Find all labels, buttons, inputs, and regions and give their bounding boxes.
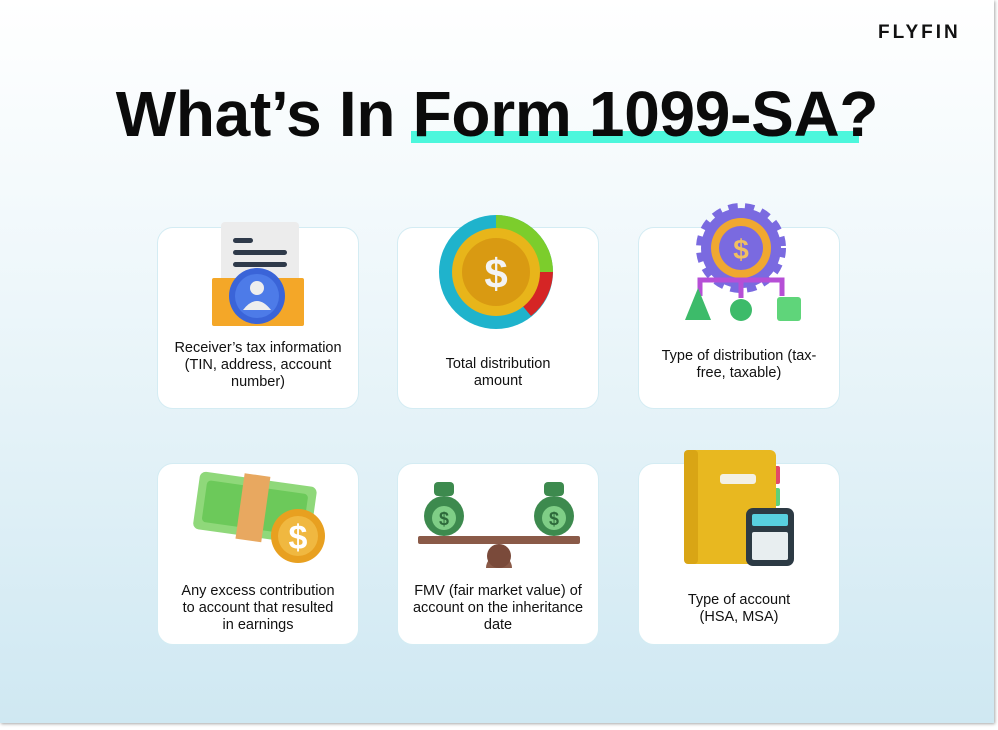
text: FMV: account on the inheritance bbox=[413, 600, 583, 616]
title: What’s In Form 1099-SA? bbox=[116, 78, 878, 150]
icon: folder with calculator bbox=[684, 450, 794, 566]
panel: type of distribution bbox=[638, 227, 840, 409]
text: receiver bbox=[174, 340, 342, 390]
text: type of distribution: free, taxable) bbox=[697, 365, 781, 381]
icon: document with person bbox=[212, 222, 304, 326]
panel: total distribution bbox=[397, 227, 599, 409]
text: FMV bbox=[413, 583, 583, 633]
text: excess contribution: in earnings bbox=[223, 617, 293, 633]
text: receiver: number) bbox=[231, 374, 285, 390]
text: excess contribution: Any excess contribution bbox=[181, 583, 335, 599]
text: total distribution: amount bbox=[474, 373, 522, 389]
text: type of account: (HSA, MSA) bbox=[700, 609, 778, 625]
text: type of distribution bbox=[662, 348, 816, 381]
panel: excess contribution bbox=[157, 463, 359, 645]
text: receiver: Receiver’s tax information bbox=[174, 340, 342, 356]
text: type of account bbox=[688, 592, 790, 625]
panel: receiver's tax information bbox=[157, 227, 359, 409]
text: total distribution: Total distribution bbox=[446, 356, 550, 372]
text: type of distribution: Type of distribution (tax- bbox=[662, 348, 816, 364]
text: type of account: Type of account bbox=[688, 592, 790, 608]
text: FMV: date bbox=[484, 617, 512, 633]
icon: balance with money bags: $ bbox=[439, 509, 449, 529]
icon: coin chart bbox=[439, 215, 553, 329]
logo: FLYFIN bbox=[878, 22, 961, 43]
text: FMV: FMV (fair market value) of bbox=[414, 583, 582, 599]
icon: cash with coin: $ bbox=[289, 519, 308, 557]
icon: cash with coin bbox=[193, 472, 325, 563]
panel: type of account bbox=[638, 463, 840, 645]
icon: coin chart: $ bbox=[484, 250, 508, 297]
title highlight bbox=[411, 131, 859, 143]
text: total distribution bbox=[446, 356, 550, 389]
icon: balance with money bags: $ bbox=[549, 509, 559, 529]
text: excess contribution: to account that resulted bbox=[183, 600, 333, 616]
text: receiver: (TIN, address, account bbox=[185, 357, 331, 373]
icon: gear with shapes bbox=[685, 203, 801, 321]
panel: FMV bbox=[397, 463, 599, 645]
text: excess contribution bbox=[181, 583, 335, 633]
icon: balance with money bags bbox=[418, 482, 580, 568]
icon: gear with shapes: $ bbox=[733, 234, 749, 265]
